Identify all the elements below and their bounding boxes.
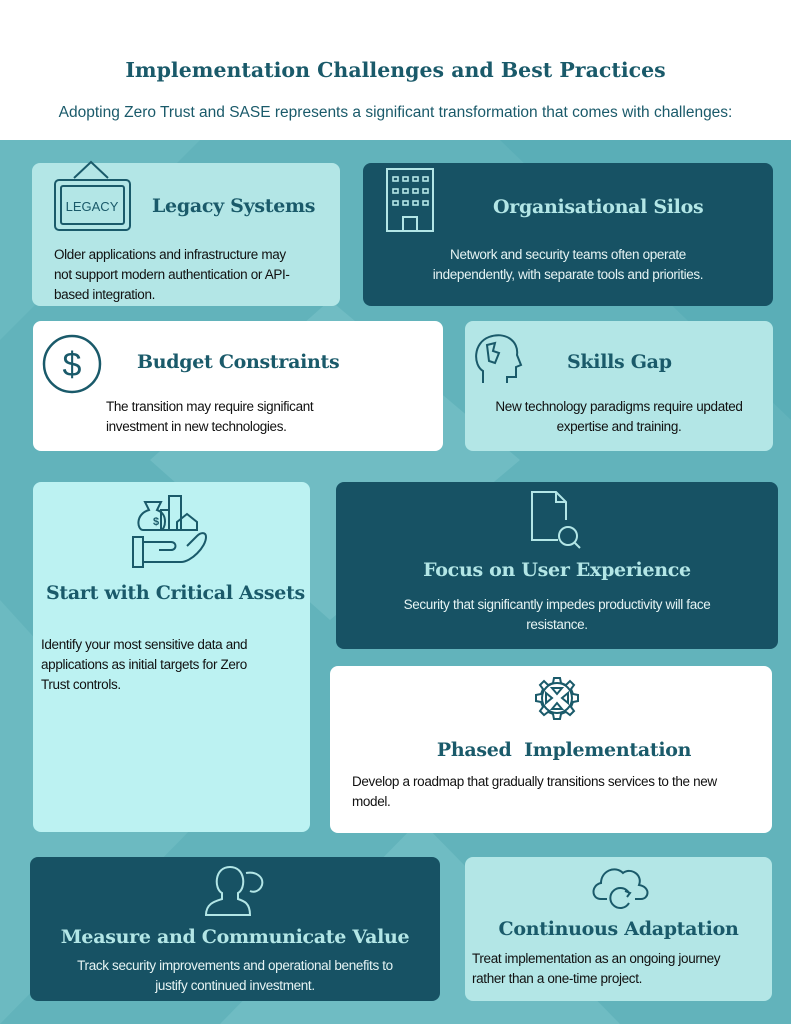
icon: legacy sign: LEGACY xyxy=(66,199,119,214)
heading: Skills Gap xyxy=(567,351,672,373)
text: Trust controls. xyxy=(41,677,121,692)
text xyxy=(106,399,314,434)
text: model. xyxy=(352,794,390,809)
icon: dollar: $ xyxy=(63,346,82,384)
heading: Legacy Systems xyxy=(152,195,315,217)
panel: legacy systems xyxy=(32,163,340,306)
icon: dollar xyxy=(42,334,102,394)
text xyxy=(41,637,247,692)
text: Older applications and infrastructure may xyxy=(54,247,286,262)
panel: skills gap xyxy=(465,321,773,451)
heading: Continuous Adaptation xyxy=(499,918,738,940)
panel: continuous adaptation xyxy=(465,857,772,1001)
text: justify continued investment. xyxy=(155,978,315,993)
text: Treat implementation as an ongoing journey xyxy=(472,951,720,966)
heading: Measure and Communicate Value xyxy=(61,926,409,948)
panel: measure and communicate value xyxy=(30,857,440,1001)
icon: cloud refresh xyxy=(592,868,648,909)
panel: focus on user experience xyxy=(336,482,778,649)
header xyxy=(0,0,791,140)
text: expertise and training. xyxy=(557,419,681,434)
title: Implementation Challenges and Best Practices xyxy=(125,58,666,82)
panel: budget constraints xyxy=(33,321,443,451)
text: applications as initial targets for Zero xyxy=(41,657,247,672)
icon: building xyxy=(386,168,434,232)
icon: document search xyxy=(531,491,581,549)
text: Security that significantly impedes productivity will face xyxy=(404,597,710,612)
text: rather than a one-time project. xyxy=(472,971,642,986)
heading: Budget Constraints xyxy=(137,351,339,373)
text: Network and security teams often operate xyxy=(450,247,686,262)
icon: head xyxy=(475,334,522,383)
text xyxy=(352,774,718,809)
text: Identify your most sensitive data and xyxy=(41,637,247,652)
icon: legacy sign xyxy=(54,160,131,231)
icon: gear xyxy=(535,677,579,720)
icon: hand with assets: $ xyxy=(153,516,159,528)
heading: Organisational Silos xyxy=(493,196,703,218)
heading: Phased Implementation xyxy=(437,739,691,761)
subtitle: Adopting Zero Trust and SASE represents a significant transformation that comes with challenges: xyxy=(59,104,732,121)
icon: hand with assets xyxy=(132,495,207,568)
panel: phased implementation xyxy=(330,666,772,833)
text: based integration. xyxy=(54,287,155,302)
text: resistance. xyxy=(526,617,588,632)
panel: organisational silos xyxy=(363,163,773,306)
text: The transition may require significant xyxy=(106,399,313,414)
text xyxy=(433,247,703,282)
heading: Focus on User Experience xyxy=(423,559,691,581)
text xyxy=(472,951,720,986)
text: Develop a roadmap that gradually transitions services to the new xyxy=(352,774,717,789)
icon: people talking xyxy=(205,866,264,916)
text: independently, with separate tools and priorities. xyxy=(433,267,703,282)
text xyxy=(495,399,743,434)
text: New technology paradigms require updated xyxy=(495,399,743,414)
text xyxy=(77,958,393,993)
text: Track security improvements and operational benefits to xyxy=(77,958,393,973)
panel: start with critical assets xyxy=(33,482,310,832)
text: investment in new technologies. xyxy=(106,419,287,434)
text: not support modern authentication or API- xyxy=(54,267,290,282)
text xyxy=(404,597,710,632)
text xyxy=(54,247,290,302)
heading: Start with Critical Assets xyxy=(46,582,305,604)
